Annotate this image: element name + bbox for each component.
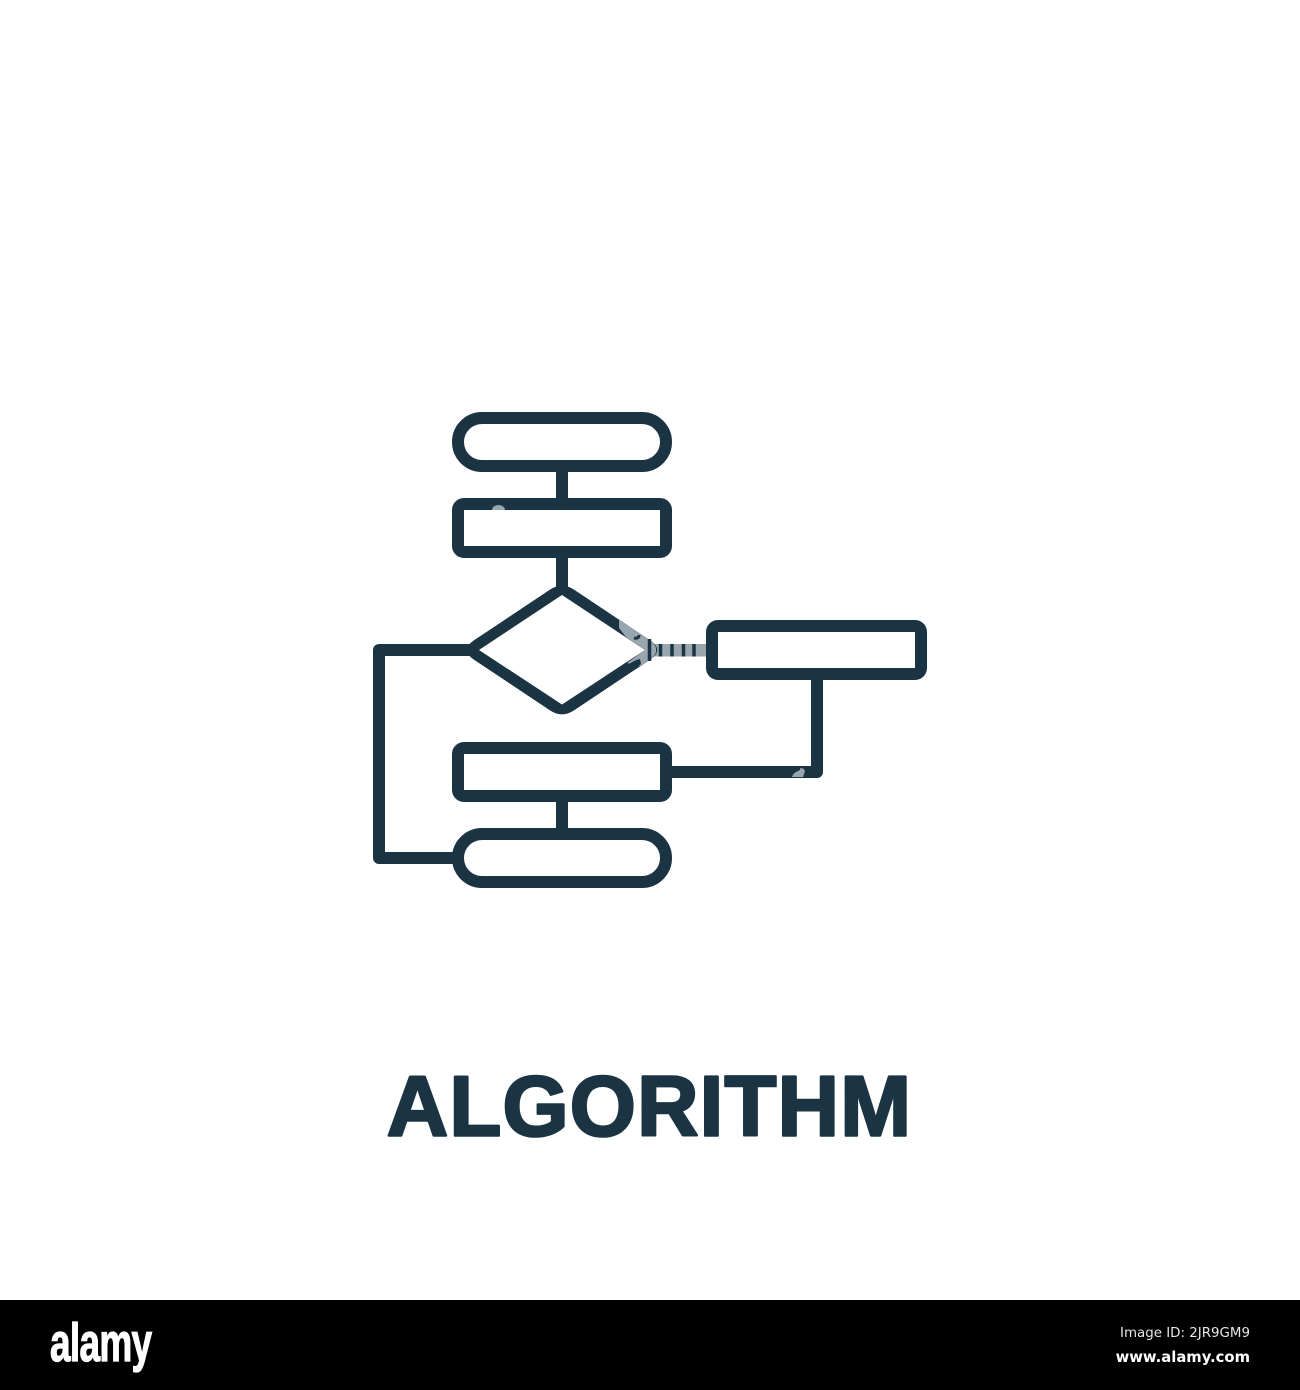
footer logo: alamy: alamy bbox=[50, 1312, 152, 1373]
footer: image id: Image ID: 2JR9GM9 bbox=[1120, 1326, 1250, 1341]
connector: top pill to first process box bbox=[556, 470, 568, 500]
footer: website: www.alamy.com bbox=[1116, 1349, 1250, 1366]
connector: right box to lower process box bbox=[670, 678, 817, 772]
flowchart: lower process box bbox=[458, 748, 666, 796]
footer bar bbox=[0, 1300, 1300, 1390]
connector: lower process box to bottom pill bbox=[556, 800, 568, 830]
icon: algorithm flowchart bbox=[379, 418, 921, 882]
flowchart: decision diamond bbox=[467, 586, 657, 714]
connector: decision to right box bbox=[652, 644, 706, 656]
watermark fragments on icon bbox=[492, 505, 805, 777]
title: ALGORITHM: ALGORITHM bbox=[387, 1060, 912, 1154]
connector: decision loop back to bottom pill bbox=[379, 650, 472, 858]
flowchart: first process box bbox=[458, 504, 666, 552]
flowchart: right process box bbox=[712, 626, 921, 674]
flowchart: bottom end pill bbox=[458, 834, 666, 882]
connector: first process box to decision diamond bbox=[556, 556, 568, 592]
flowchart: top start pill bbox=[458, 418, 666, 466]
